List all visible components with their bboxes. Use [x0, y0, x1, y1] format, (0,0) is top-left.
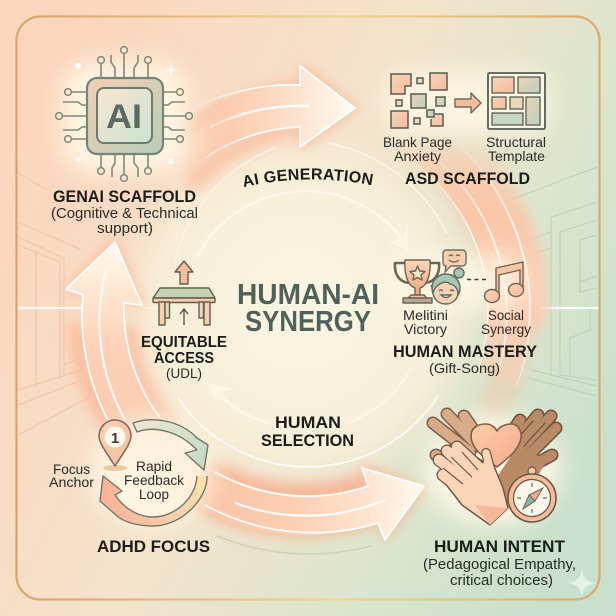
heading: access: ACCESS — [154, 350, 214, 367]
icon: compass — [508, 467, 556, 522]
panel: ADHD focus — [49, 420, 210, 556]
text: support: support) — [97, 221, 153, 237]
text: template: Template — [488, 148, 545, 164]
room line drawing: right — [510, 167, 597, 396]
icon: structural template — [488, 73, 545, 129]
text: feedback: Feedback — [124, 472, 185, 488]
text: gift-song: (Gift-Song) — [429, 360, 500, 376]
icon: AI chip: AI — [106, 98, 142, 136]
text: blank page: Blank Page — [383, 134, 452, 150]
heading: GenAI scaffold: GENAI SCAFFOLD — [53, 188, 196, 206]
panel: GenAI scaffold — [51, 47, 198, 237]
arrow: bottom loop — [100, 476, 207, 526]
icon: shadow under pin — [103, 465, 127, 471]
arrow: top loop — [133, 420, 208, 470]
icon: smiling girl — [431, 268, 464, 304]
label: AI generation curved: AI GENERATION — [244, 168, 373, 187]
synergy ring peach halo — [76, 85, 518, 510]
central radial glow — [110, 120, 490, 500]
connector dashes — [467, 278, 487, 280]
text: social: Social — [488, 307, 524, 323]
icon glows — [62, 62, 560, 527]
arrowhead: inner arc to equitable access — [208, 383, 231, 404]
icon: raised arrow — [175, 261, 193, 284]
text: anchor: Anchor — [49, 474, 94, 490]
panel: equitable access — [141, 261, 227, 381]
icon: location pin: 1 — [111, 430, 119, 447]
icon: table — [153, 288, 215, 325]
panel: ASD scaffold — [383, 73, 546, 188]
arrow: right arc band — [396, 115, 530, 387]
text: structural: Structural — [486, 134, 546, 150]
icon: scattered blocks — [391, 73, 447, 128]
horizon light line — [18, 307, 598, 309]
heading: human mastery: HUMAN MASTERY — [393, 343, 537, 361]
text: loop: Loop — [139, 486, 169, 502]
arrow: human selection bottom sweep — [146, 439, 424, 540]
panel: human intent — [423, 414, 576, 589]
icon: front hand — [439, 447, 508, 525]
room line drawing: left — [18, 173, 88, 435]
label: human selection — [261, 414, 354, 450]
sparkle — [567, 568, 597, 598]
inner cycle arcs — [175, 143, 447, 554]
text: melitini: Melitini — [403, 307, 448, 323]
icon: small up arrow — [180, 309, 188, 325]
text: critical choices: critical choices) — [450, 573, 553, 589]
icon: speech bubble — [443, 250, 466, 272]
text: victory: Victory — [404, 321, 447, 337]
arrowhead: inner arc to mastery — [388, 221, 408, 251]
icon: trophy — [395, 260, 439, 303]
heading: ADHD focus: ADHD FOCUS — [97, 538, 210, 556]
heading: human intent: HUMAN INTENT — [434, 538, 565, 556]
text: cognitive and technical: (Cognitive & Technical — [51, 206, 198, 222]
text: synergy: Synergy — [481, 321, 531, 337]
text: rapid: Rapid — [136, 458, 172, 474]
arrow: AI generation — [146, 66, 355, 181]
icon: AI chip — [56, 47, 192, 181]
center title — [237, 279, 379, 338]
icon: location pin — [99, 420, 131, 466]
label: human selection: SELECTION — [261, 432, 354, 450]
panel: human mastery — [393, 250, 537, 376]
arrow: left rising arc — [66, 242, 176, 469]
arrow: chaos to structure — [455, 93, 481, 113]
icon: back right hand — [495, 415, 556, 505]
icon: back left hand — [433, 414, 495, 485]
icon: heart — [471, 424, 521, 467]
label: human selection: HUMAN — [275, 414, 341, 432]
heading: ASD scaffold: ASD SCAFFOLD — [405, 170, 530, 188]
icon: music note — [484, 262, 524, 302]
heading: equitable: EQUITABLE — [141, 334, 227, 351]
text: anxiety: Anxiety — [394, 148, 441, 164]
text: UDL: (UDL) — [166, 365, 202, 381]
text: pedagogical empathy: (Pedagogical Empathy, — [423, 557, 576, 573]
center title: SYNERGY — [245, 306, 371, 338]
text: focus: Focus — [53, 461, 90, 477]
arrowhead halo — [64, 62, 428, 544]
center title: HUMAN-AI — [237, 279, 379, 311]
